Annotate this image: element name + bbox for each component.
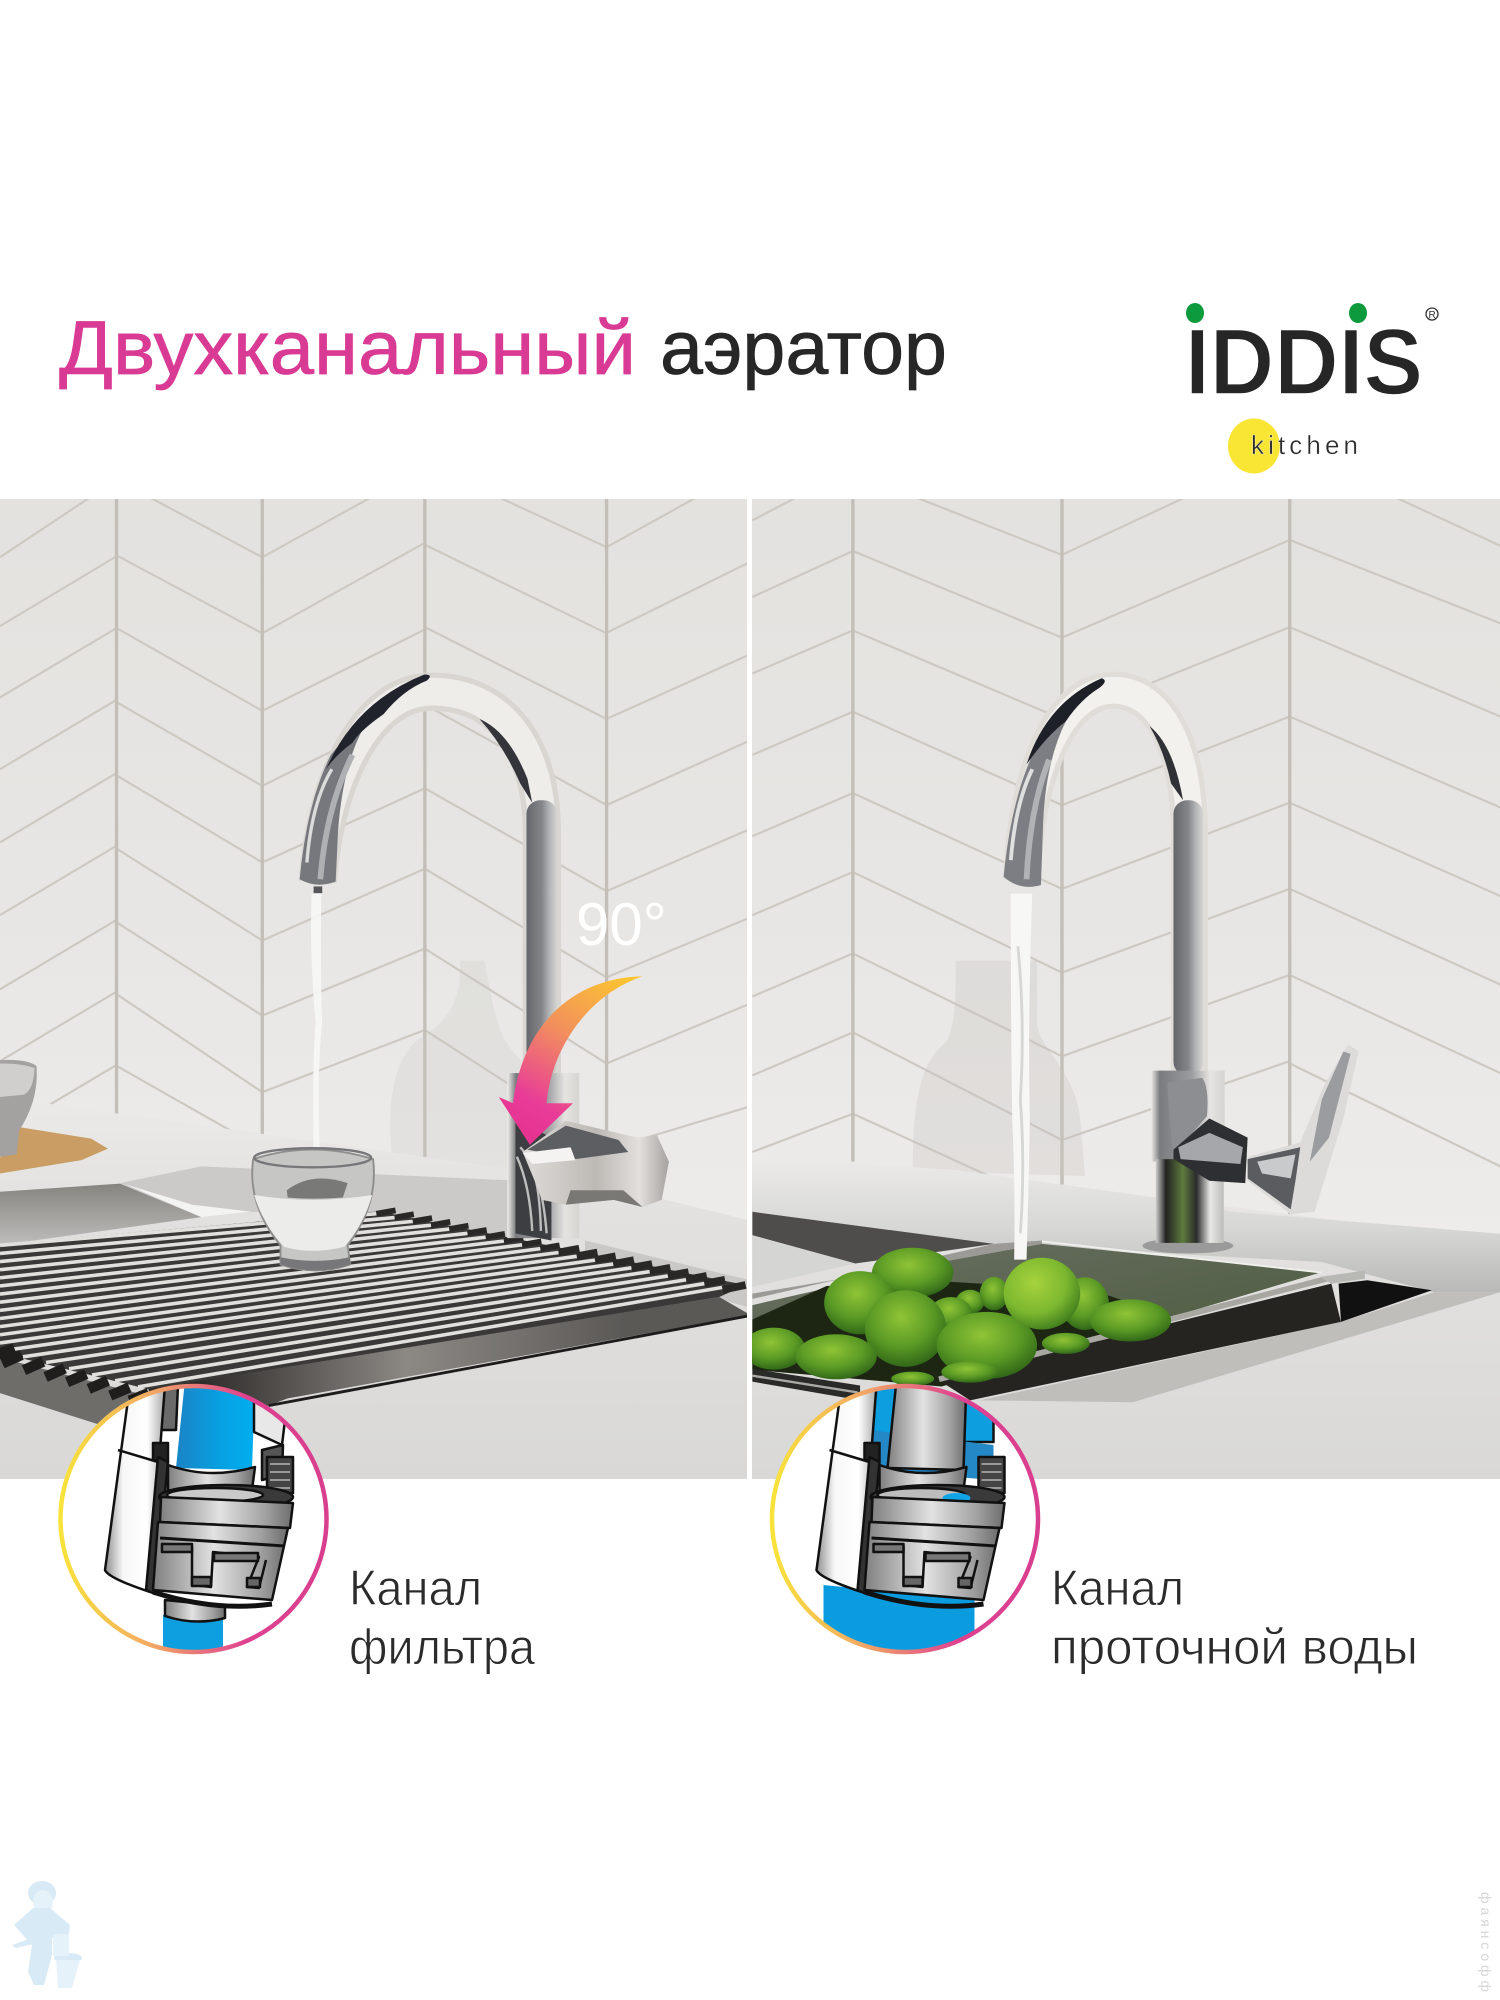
panel: left photo, filter channel xyxy=(0,463,753,1482)
title: аэратор xyxy=(660,306,947,391)
watermark: vertical site name: фаянсофф xyxy=(1478,1892,1494,1992)
label: 90 degrees: 90° xyxy=(576,891,667,958)
faucet xyxy=(1004,678,1248,1253)
bottle shadow on wall xyxy=(913,961,1085,1176)
logo: iddis kitchen: R xyxy=(1428,310,1436,321)
faucet lever xyxy=(523,1121,669,1207)
caption: filter channel: Канал xyxy=(349,1560,482,1616)
aerator cutaway drawing xyxy=(816,1380,1004,1660)
countertop xyxy=(0,1097,750,1482)
sink xyxy=(752,1212,1500,1402)
logo: iddis kitchen xyxy=(1185,303,1438,474)
callout: filter channel aerator xyxy=(60,1380,328,1655)
water stream xyxy=(311,894,322,1166)
countertop xyxy=(750,1156,1500,1482)
panel: right photo, tap water channel xyxy=(743,449,1500,1482)
caption: tap water channel: проточной воды xyxy=(1051,1619,1418,1675)
arrow: 90 degree turn xyxy=(499,976,643,1145)
aerator cutaway drawing xyxy=(105,1380,293,1655)
callout: tap water channel aerator xyxy=(771,1380,1039,1660)
logo: iddis kitchen: IDDIS xyxy=(1185,309,1423,414)
bottle shadow on wall xyxy=(390,961,523,1171)
watermark: plumber with toilet xyxy=(12,1881,82,1988)
title xyxy=(59,306,947,391)
caption: filter channel: фильтра xyxy=(349,1619,535,1675)
caption: filter channel xyxy=(349,1560,535,1675)
wooden board with bowl xyxy=(0,1060,108,1174)
caption: tap water channel: Канал xyxy=(1051,1560,1184,1616)
tile wall xyxy=(752,499,1500,1234)
faucet xyxy=(300,674,579,1241)
logo: iddis kitchen: kitchen xyxy=(1251,430,1358,460)
title: Двухканальный xyxy=(59,306,636,391)
fruits xyxy=(743,1248,1171,1386)
sink deck and basin xyxy=(0,1166,750,1308)
water stream xyxy=(1011,894,1032,1260)
tile wall xyxy=(0,499,747,1220)
glass xyxy=(252,1148,374,1270)
drying mat xyxy=(0,1210,750,1427)
caption: tap water channel xyxy=(1051,1560,1418,1675)
faucet lever xyxy=(1248,1044,1359,1214)
